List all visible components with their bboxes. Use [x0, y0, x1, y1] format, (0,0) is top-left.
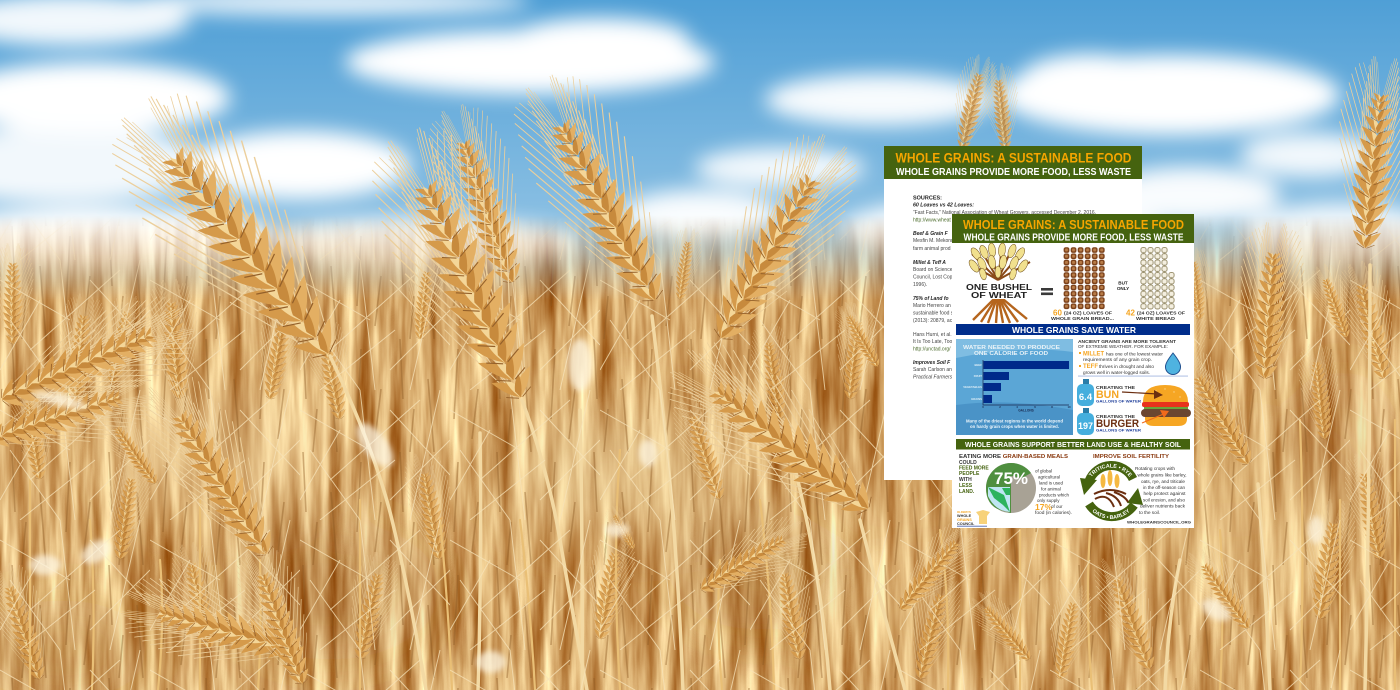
- text block: ancient grains: [1078, 339, 1176, 375]
- back document sources text: farm animal prod: [913, 246, 951, 252]
- label: one bushel of wheat: [965, 282, 1033, 300]
- text: agricultural land statistic: agricultural: [1038, 474, 1060, 480]
- text: could feed more people with less land: LESS: [959, 483, 973, 489]
- label: creating the bun: CREATING THE: [1096, 385, 1136, 391]
- wheat stalks: [30, 265, 1395, 690]
- label: creating the burger: GALLONS OF WATER: [1096, 428, 1141, 432]
- label: but only: BUT: [1118, 280, 1128, 286]
- back document sources text: Council, Lost Cop: [913, 274, 953, 280]
- back document sources text: Mario Herrero an: [913, 303, 951, 309]
- back document sources text: “Fast Facts,” National Association of Wheat Growers, accessed December 2, 2016,: [913, 210, 1096, 216]
- text: rotating crops: help protect against: [1144, 491, 1186, 496]
- section heading: save water: [956, 324, 1190, 335]
- back document sources text: Practical Farmers o: [913, 374, 957, 380]
- label: 60 loaves: [1051, 308, 1114, 321]
- text: could feed more people with less land: COULD: [959, 460, 977, 466]
- text: agricultural land statistic: for animal: [1041, 486, 1061, 492]
- text block: ancient grains: TEFF: [1083, 364, 1098, 370]
- text: agricultural land statistic: [1035, 468, 1072, 515]
- bar chart: water needed per calorie: 4: [1016, 405, 1018, 409]
- text: could feed more people with less land: LAND.: [959, 489, 975, 495]
- icon: water drop: [1165, 353, 1181, 374]
- bar chart: water needed per calorie: 6: [1034, 405, 1036, 409]
- label: 42 loaves: (24 OZ) LOAVES OF: [1137, 310, 1185, 316]
- label: 60 loaves: WHOLE GRAIN BREAD...: [1051, 316, 1114, 321]
- icon: globe 75 percent: [986, 463, 1036, 513]
- arrow: bun water: [1122, 390, 1163, 399]
- text: rotating crops: soil erosion, and also: [1143, 498, 1185, 502]
- text: agricultural land statistic: land is used: [1039, 480, 1064, 486]
- section heading: land use: WHOLE GRAINS SUPPORT BETTER LAND USE & HEALTHY SOIL: [965, 440, 1181, 449]
- heading: eating more grain-based meals: EATING MORE GRAIN-BASED MEALS: [959, 454, 1069, 460]
- back document sources text: 1996).: [913, 282, 927, 288]
- label: one bushel of wheat: ONE BUSHEL: [966, 283, 1032, 292]
- logo: whole grains council: GRAINS: [957, 518, 972, 522]
- icon: water bottle 197 gallons: 197: [1078, 421, 1093, 431]
- text block: ancient grains: ANCIENT GRAINS ARE MORE TOLERANT: [1078, 339, 1176, 344]
- label: creating the burger: BURGER: [1096, 418, 1139, 430]
- label: creating the bun: [1096, 385, 1141, 404]
- bar chart: water needed per calorie: WATER NEEDED TO PRODUCE: [963, 345, 1060, 351]
- back document sources text: SOURCES:: [913, 196, 942, 202]
- text block: ancient grains: grows well in water-logged soils.: [1083, 370, 1150, 375]
- icon: crop rotation circle: OATS • BARLEY: [1092, 508, 1129, 519]
- sky with clouds: [0, 0, 1400, 340]
- text block: ancient grains: has one of the lowest water: [1106, 352, 1163, 356]
- front document: infographic page: [952, 214, 1194, 528]
- bar chart: water needed per calorie: BEEF: [975, 363, 982, 367]
- label: 60 loaves: (24 OZ) LOAVES OF: [1064, 310, 1112, 316]
- text: agricultural land statistic: food (in calories).: [1035, 510, 1072, 515]
- icon: burger: [1141, 385, 1191, 426]
- back document sources text: (2013): 20879, acc: [913, 318, 955, 324]
- heading: improve soil fertility: IMPROVE SOIL FERTILITY: [1093, 454, 1169, 460]
- logo: whole grains council: WHOLE: [957, 514, 972, 518]
- text block: ancient grains: MILLET: [1083, 352, 1104, 358]
- pale sunlit wheat heads: [29, 339, 1324, 673]
- text: agricultural land statistic: only supply: [1037, 498, 1060, 503]
- back document header: [884, 146, 1142, 179]
- bar chart: water needed per calorie: GALLONS: [1018, 408, 1034, 412]
- text: agricultural land statistic: of our: [1051, 504, 1063, 509]
- label: creating the bun: BUN: [1096, 389, 1119, 401]
- bar chart: water needed per calorie: 10: [1067, 405, 1071, 409]
- label: 42 loaves: WHITE BREAD: [1136, 316, 1175, 321]
- front document header: WHOLE GRAINS PROVIDE MORE FOOD, LESS WASTE: [964, 232, 1184, 244]
- label: creating the bun: GALLONS OF WATER: [1096, 400, 1141, 404]
- icon: globe 75 percent: 75%: [994, 469, 1028, 488]
- icon: water bottle 197 gallons: [1077, 408, 1094, 435]
- white bread loaves icon array: [1140, 247, 1175, 310]
- bar chart: water needed per calorie: VEGETABLES: [963, 385, 982, 389]
- icon: crop rotation circle: [1080, 461, 1143, 522]
- whole grain loaves icon array: [1063, 247, 1105, 310]
- text: agricultural land statistic: of global: [1035, 468, 1052, 474]
- text: could feed more people with less land: WITH: [959, 477, 972, 483]
- back document sources text: 60 Loaves vs 42 Loaves:: [913, 202, 974, 208]
- bar chart: water needed per calorie: 2: [999, 405, 1001, 409]
- text: agricultural land statistic: products which: [1039, 492, 1070, 498]
- front document header: WHOLE GRAINS: A SUSTAINABLE FOOD: [963, 217, 1184, 232]
- text: could feed more people with less land: [959, 460, 989, 495]
- logo: whole grains council: [957, 510, 990, 526]
- back document: sources page: [884, 146, 1142, 480]
- back document sources text: http://www.wheat: [913, 218, 951, 224]
- back document sources text: http://unctad.org/: [913, 346, 951, 352]
- back document sources text: sustainable food s: [913, 310, 954, 316]
- text: rotating crops: in the off-season can: [1143, 485, 1185, 490]
- bar chart: water needed per calorie: GRAINS: [971, 397, 982, 401]
- text: rotating crops: whole grains like barley,: [1138, 472, 1186, 478]
- back document sources text: Improves Soil F: [913, 360, 951, 366]
- logo: whole grains council: COUNCIL: [957, 522, 975, 526]
- label: 42 loaves: [1126, 308, 1185, 321]
- bar chart: water needed per calorie: FRUIT: [974, 374, 982, 378]
- fine wheat awns: [0, 226, 1400, 690]
- website url: WHOLEGRAINSCOUNCIL.ORG: [1127, 520, 1191, 524]
- back document sources text: Beef & Grain F: [913, 231, 949, 237]
- back document sources text: Millet & Teff A: [913, 260, 946, 266]
- bar chart: water needed per calorie: 0: [982, 405, 984, 409]
- bar chart: water needed per calorie: ONE CALORIE OF FOOD: [974, 351, 1048, 357]
- back document header: WHOLE GRAINS PROVIDE MORE FOOD, LESS WASTE: [896, 166, 1131, 178]
- label: creating the burger: CREATING THE: [1096, 414, 1136, 420]
- text block: ancient grains: requirements of any grain crop.: [1083, 357, 1152, 362]
- back document sources text: Mesfin M. Mekonn: [913, 238, 954, 244]
- text: could feed more people with less land: FEED MORE: [959, 466, 989, 472]
- front document header: [952, 214, 1194, 244]
- icon: equals sign: [1041, 288, 1053, 295]
- label: 42 loaves: 42: [1126, 308, 1135, 318]
- text: rotating crops: [1135, 466, 1186, 515]
- back document sources text: Board on Science: [913, 267, 953, 273]
- icon: water bottle 6.4 gallons: [1077, 379, 1094, 406]
- text: rotating crops: deliver nutrients back: [1140, 504, 1186, 508]
- text block: ancient grains: OF EXTREME WEATHER. FOR EXAMPLE:: [1078, 344, 1168, 349]
- bar chart: water needed per calorie: Many of the driest regions in the world depend: [966, 418, 1064, 424]
- label: one bushel of wheat: OF WHEAT: [971, 291, 1027, 300]
- bar chart: water needed per calorie: on hardy grain crops when water is limited.: [970, 424, 1059, 429]
- back document sources text: [913, 196, 1096, 380]
- text: rotating crops: to the soil.: [1139, 510, 1160, 515]
- back document sources text: Hans Hurni, et al.,: [913, 332, 953, 338]
- icon: crop rotation circle: TRITICALE • RYE: [1088, 464, 1132, 477]
- text block: ancient grains: thrives in drought and also: [1099, 364, 1154, 369]
- text: rotating crops: Rotating crops with: [1135, 466, 1176, 471]
- arrow: burger water: [1142, 410, 1169, 423]
- icon: water bottle 6.4 gallons: 6.4: [1079, 392, 1093, 403]
- bar chart: water needed per calorie: 8: [1051, 405, 1053, 409]
- label: creating the burger: [1096, 414, 1141, 432]
- logo: whole grains council: OLDWAYS: [957, 510, 971, 514]
- text: could feed more people with less land: PEOPLE: [959, 471, 980, 477]
- text: agricultural land statistic: 17%: [1035, 502, 1052, 512]
- label: 60 loaves: 60: [1053, 308, 1062, 318]
- wheat field texture: [0, 218, 1400, 690]
- back document sources text: 75% of Land fo: [913, 296, 949, 302]
- back document sources text: Sarah Carlson and: [913, 367, 955, 373]
- label: but only: ONLY: [1117, 286, 1129, 291]
- bar chart: water needed per calorie: [956, 339, 1073, 435]
- label: but only: [1117, 280, 1129, 291]
- text: rotating crops: oats, rye, and triticale: [1141, 479, 1185, 484]
- back document sources text: It Is Too Late, Too: [913, 339, 953, 345]
- icon: wheat sheaf: [967, 243, 1030, 323]
- section heading: save water: WHOLE GRAINS SAVE WATER: [1012, 325, 1136, 335]
- back document header: WHOLE GRAINS: A SUSTAINABLE FOOD: [896, 150, 1132, 166]
